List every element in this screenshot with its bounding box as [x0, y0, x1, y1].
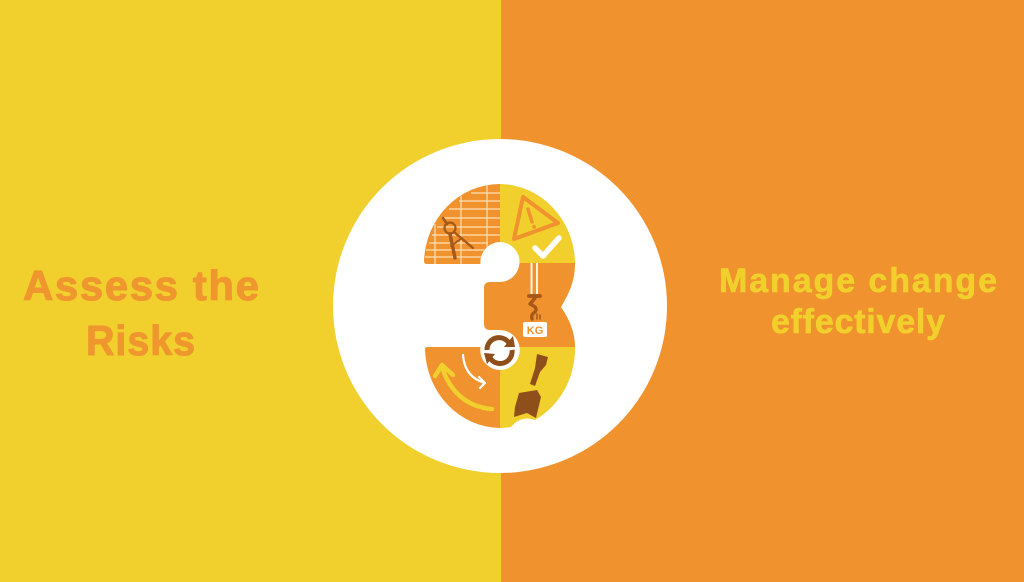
icon: hook	[529, 296, 540, 319]
heading: Assess the Risks	[23, 262, 259, 364]
icon: refresh arrows	[484, 336, 515, 364]
quadrant: curved arrows	[425, 347, 500, 428]
heading: Manage change effectively: effectively	[771, 303, 945, 341]
grid lines	[425, 185, 500, 264]
icon: drawing compass	[443, 218, 473, 258]
panel: right orange background	[501, 0, 1024, 582]
heading: Assess the Risks: Risks	[86, 317, 196, 364]
heading: Manage change effectively	[719, 262, 997, 341]
icon: white arc arrow	[463, 355, 485, 388]
icon: yellow arc arrow	[435, 365, 492, 409]
numeral 3 illustration	[424, 184, 575, 428]
white centre circle	[333, 139, 667, 473]
icon: warning triangle	[514, 197, 558, 239]
heading: Assess the Risks: Assess the	[23, 262, 259, 309]
quadrant: blueprint grid	[424, 184, 500, 264]
icon: check mark	[535, 238, 559, 256]
icon: KG weight: KG	[527, 325, 543, 337]
panel: left yellow background	[0, 0, 501, 582]
quadrant: crane hook and weight	[484, 263, 575, 347]
heading: Manage change effectively: Manage change	[719, 262, 997, 300]
quadrant: shovel	[500, 347, 575, 428]
icon: shovel	[514, 354, 548, 418]
crane cable	[532, 263, 537, 294]
quadrant: warning and check	[500, 184, 575, 263]
